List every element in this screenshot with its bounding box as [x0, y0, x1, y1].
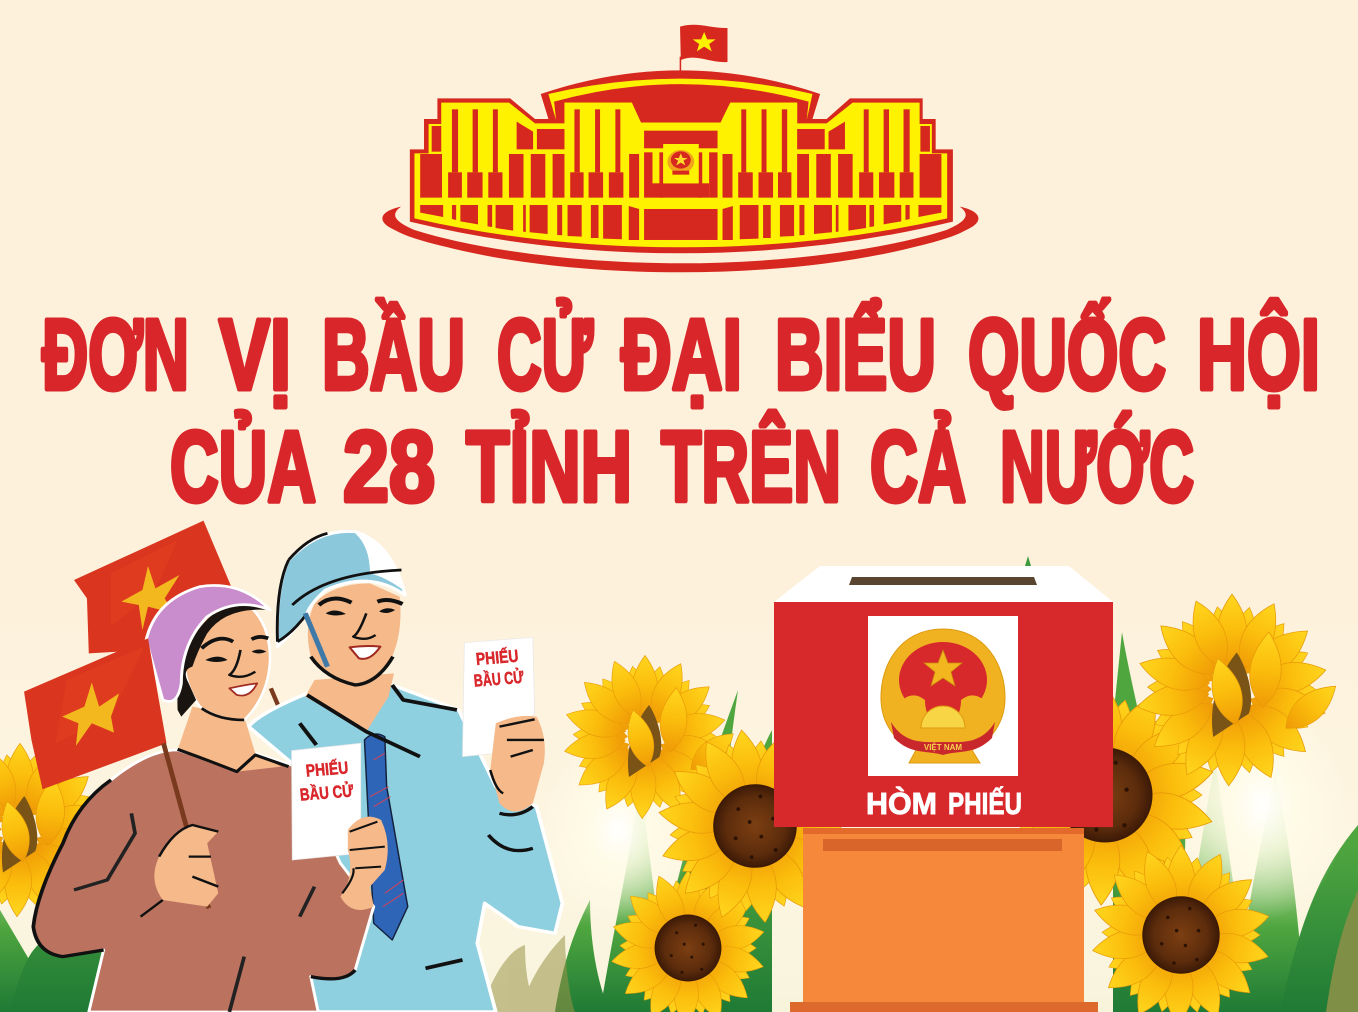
- sunflower: left of box: [644, 716, 866, 936]
- title line 1: VỊ: [219, 299, 291, 411]
- ballot left: BẦU CỬ: [299, 780, 355, 804]
- man hand: [490, 716, 545, 812]
- woman hand on pole: [141, 825, 218, 917]
- title line 1: BẦU: [322, 299, 465, 411]
- sunflower: upper right: [1135, 594, 1344, 786]
- box front: [774, 602, 1113, 827]
- title line 2: CẢ: [870, 410, 966, 523]
- title line 1: BIỂU: [775, 299, 936, 411]
- cuff lines: [488, 807, 533, 851]
- grass left: [0, 890, 120, 1012]
- emblem ribbon text: VIỆT NAM: [924, 743, 962, 752]
- flag pole front: [164, 743, 209, 908]
- title line 1: CỬ: [497, 299, 593, 411]
- man neck: [305, 673, 394, 732]
- man: [249, 531, 562, 1012]
- man face: [308, 583, 401, 685]
- lid slot: [849, 577, 1037, 585]
- ballot right: [462, 637, 535, 757]
- woman face: [184, 600, 270, 720]
- title line 2: TRÊN: [661, 411, 841, 523]
- title line 1: ĐẠI: [621, 299, 742, 411]
- grass right: [555, 556, 1358, 1012]
- title: [42, 299, 1320, 523]
- olive grass behind man: [480, 935, 575, 1012]
- collar lines: [300, 685, 462, 968]
- title line 2: NƯỚC: [1000, 411, 1194, 523]
- sunflower: lower left small: [610, 870, 766, 1012]
- oval base ring: [382, 207, 978, 272]
- man body: [249, 685, 562, 1012]
- sunflowers: [0, 594, 1344, 1012]
- title line 2: 28: [343, 411, 435, 523]
- woman neck: [178, 707, 281, 772]
- flag front: [24, 638, 166, 789]
- woman hair: [177, 597, 268, 717]
- box stand: [790, 828, 1098, 1012]
- icon: small national emblem: [667, 150, 694, 175]
- woman body: [33, 750, 374, 1012]
- emblem panel: [868, 616, 1018, 776]
- woman right hand: [340, 817, 388, 910]
- woman features: [202, 637, 268, 648]
- icon: national emblem: [881, 629, 1005, 763]
- title line 1: ĐƠN: [42, 299, 189, 411]
- flag pole back: [271, 688, 296, 747]
- title line 1: QUỐC: [968, 299, 1166, 411]
- headscarf: [146, 585, 270, 701]
- ballot left: [292, 743, 361, 860]
- building emblem: [382, 25, 978, 272]
- ballot text: PHIẾU: [475, 646, 519, 669]
- ballot right: BẦU CỬ: [473, 667, 525, 690]
- flag back: [74, 521, 231, 653]
- title line 2: TỈNH: [466, 411, 632, 523]
- title line 1: [42, 299, 1320, 411]
- sunflower: right of box: [994, 685, 1216, 906]
- box lid: [774, 566, 1113, 602]
- light glows: [543, 690, 1347, 925]
- ballot text: PHIẾU: [305, 757, 349, 780]
- voters illustration: [24, 521, 562, 1012]
- woman: [33, 585, 374, 1012]
- title line 2: [170, 410, 1194, 523]
- icon: flag on roof: [680, 25, 727, 71]
- title line 2: CỦA: [170, 411, 316, 523]
- helmet: [277, 531, 405, 647]
- box label: [866, 785, 1022, 821]
- box label: HÒM: [866, 785, 937, 821]
- parliament building: [410, 70, 953, 253]
- box label: PHIẾU: [948, 786, 1022, 821]
- sunflower: upper left of box: [562, 655, 741, 819]
- sunflower: left edge: [0, 743, 122, 917]
- ballot box: [774, 566, 1113, 1012]
- tie: [364, 734, 408, 940]
- sunflower: lower right: [1090, 845, 1272, 1012]
